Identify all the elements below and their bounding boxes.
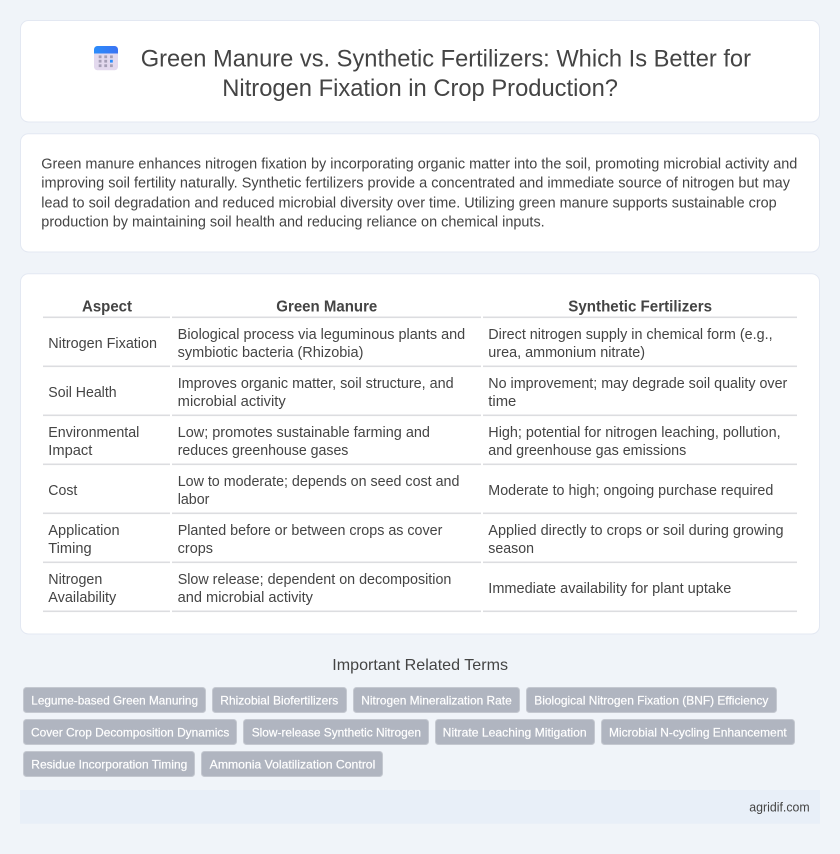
- text block: intro paragraph: improving soil fertility naturally. Synthetic fertilizers provide a concentrated and immediate source of nitrogen but may: [41, 175, 791, 191]
- table row: soil health: [48, 376, 787, 410]
- table row: nitrogen fixation: urea, ammonium nitrate): [488, 345, 645, 361]
- table row: application timing: Applied directly to crops or soil during growing: [488, 523, 784, 539]
- tags: related terms: Ammonia Volatilization Control: [210, 757, 375, 771]
- heading: title: Nitrogen Fixation in Crop Production?: [222, 75, 618, 102]
- table row: soil health: Soil Health: [48, 385, 117, 401]
- table row: soil health: time: [488, 394, 516, 410]
- icon: calendar: [94, 46, 118, 70]
- panel: introduction: [20, 134, 820, 252]
- tags: related terms: Nitrate Leaching Mitigation: [443, 726, 587, 740]
- heading: important related terms: Important Related Terms: [332, 657, 508, 674]
- table row: nitrogen fixation: Biological process via leguminous plants and: [178, 327, 465, 343]
- panel: title header: [20, 20, 820, 122]
- tags: related terms: [24, 688, 794, 776]
- text block: intro paragraph: lead to soil degradation and reduced microbial diversity over time. Utilizing green manure supports sustainable crop: [41, 195, 777, 211]
- table row: nitrogen fixation: Nitrogen Fixation: [48, 336, 157, 352]
- table row: cost: Cost: [48, 483, 77, 499]
- text block: intro paragraph: production by maintaining soil health and reducing reliance on chemical inputs.: [41, 214, 545, 230]
- table row: nitrogen fixation: Direct nitrogen supply in chemical form (e.g.,: [488, 327, 773, 343]
- tags: related terms: Slow-release Synthetic Nitrogen: [252, 726, 421, 740]
- table row: nitrogen availability: [48, 572, 731, 606]
- tags: related terms: Biological Nitrogen Fixation (BNF) Efficiency: [534, 693, 768, 707]
- table row: environmental impact: High; potential for nitrogen leaching, pollution,: [488, 425, 781, 441]
- table row: application timing: crops: [178, 541, 213, 557]
- table row: environmental impact: Environmental: [48, 425, 139, 441]
- table row: soil health: microbial activity: [178, 394, 287, 410]
- table row: soil health: Improves organic matter, soil structure, and: [178, 376, 454, 392]
- table row: environmental impact: Impact: [48, 443, 92, 459]
- table row: application timing: [48, 523, 784, 557]
- table row: environmental impact: [48, 425, 781, 459]
- table row: cost: Moderate to high; ongoing purchase required: [488, 483, 773, 499]
- table header row: [82, 299, 712, 316]
- table row: environmental impact: Low; promotes sustainable farming and: [178, 425, 430, 441]
- table row: application timing: Planted before or between crops as cover: [178, 523, 443, 539]
- table row: environmental impact: and greenhouse gas emissions: [488, 443, 686, 459]
- table row: soil health: No improvement; may degrade soil quality over: [488, 376, 787, 392]
- table row: cost: Low to moderate; depends on seed cost and: [178, 474, 459, 490]
- table row: nitrogen availability: Immediate availability for plant uptake: [488, 581, 731, 597]
- table row: nitrogen availability: Availability: [48, 590, 117, 606]
- tags: related terms: Microbial N-cycling Enhancement: [609, 726, 787, 740]
- table row: application timing: Timing: [48, 541, 92, 557]
- tags: related terms: Legume-based Green Manuring: [31, 693, 198, 707]
- tags: related terms: Nitrogen Mineralization Rate: [361, 693, 512, 707]
- heading: title: [141, 46, 751, 102]
- table row: nitrogen availability: and microbial activity: [178, 590, 314, 606]
- table row: application timing: season: [488, 541, 534, 557]
- panel: comparison table: [20, 274, 820, 634]
- table row: application timing: Application: [48, 523, 120, 539]
- tags: related terms: Residue Incorporation Timing: [31, 757, 187, 771]
- table row: cost: [48, 474, 773, 508]
- table row: cost: labor: [178, 492, 210, 508]
- table row: nitrogen availability: Nitrogen: [48, 572, 102, 588]
- table row: nitrogen fixation: symbiotic bacteria (Rhizobia): [178, 345, 363, 361]
- table header row: Green Manure: [276, 299, 377, 316]
- table header row: Synthetic Fertilizers: [568, 299, 712, 316]
- footer: agridif.com: [749, 800, 810, 814]
- text block: intro paragraph: [41, 156, 797, 230]
- heading: title: Green Manure vs. Synthetic Fertilizers: Which Is Better for: [141, 46, 751, 73]
- table header row: Aspect: [82, 299, 133, 316]
- table row: nitrogen fixation: [48, 327, 773, 361]
- text block: intro paragraph: Green manure enhances nitrogen fixation by incorporating organic matter into the soil, promoting microbial activity and: [41, 156, 797, 172]
- table row: environmental impact: reduces greenhouse gases: [178, 443, 348, 459]
- tags: related terms: Cover Crop Decomposition Dynamics: [31, 726, 229, 740]
- tags: related terms: Rhizobial Biofertilizers: [220, 693, 338, 707]
- footer: [20, 790, 820, 824]
- table row: nitrogen availability: Slow release; dependent on decomposition: [178, 572, 451, 588]
